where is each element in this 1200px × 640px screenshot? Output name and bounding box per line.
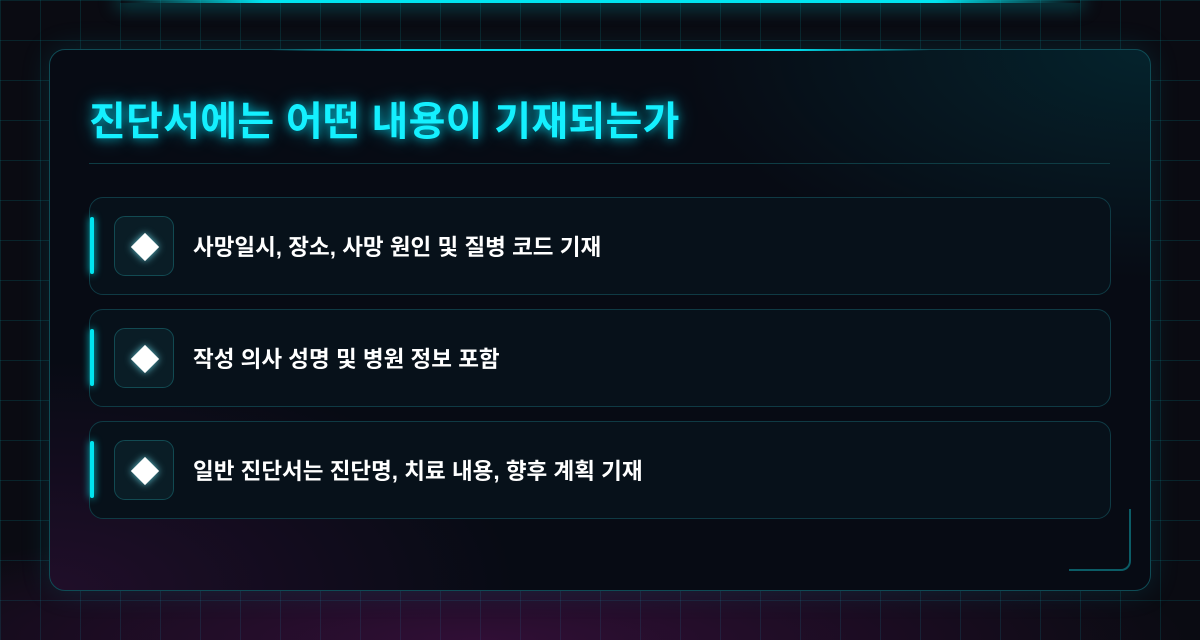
text 1: 사망일시, 장소, 사망 원인 및 질병 코드 기재	[193, 235, 601, 260]
panel: main card	[49, 49, 1151, 591]
item 1	[89, 197, 1111, 295]
icon: diamond	[114, 216, 174, 276]
icon: diamond	[114, 328, 174, 388]
text 2: 작성 의사 성명 및 병원 정보 포함	[193, 347, 500, 372]
text 3: 일반 진단서는 진단명, 치료 내용, 향후 계획 기재	[193, 459, 643, 484]
title: 진단서에는 어떤 내용이 기재되는가	[89, 100, 680, 144]
corner bracket	[1069, 509, 1131, 571]
item 2	[89, 309, 1111, 407]
item 3	[89, 421, 1111, 519]
icon: diamond	[114, 440, 174, 500]
